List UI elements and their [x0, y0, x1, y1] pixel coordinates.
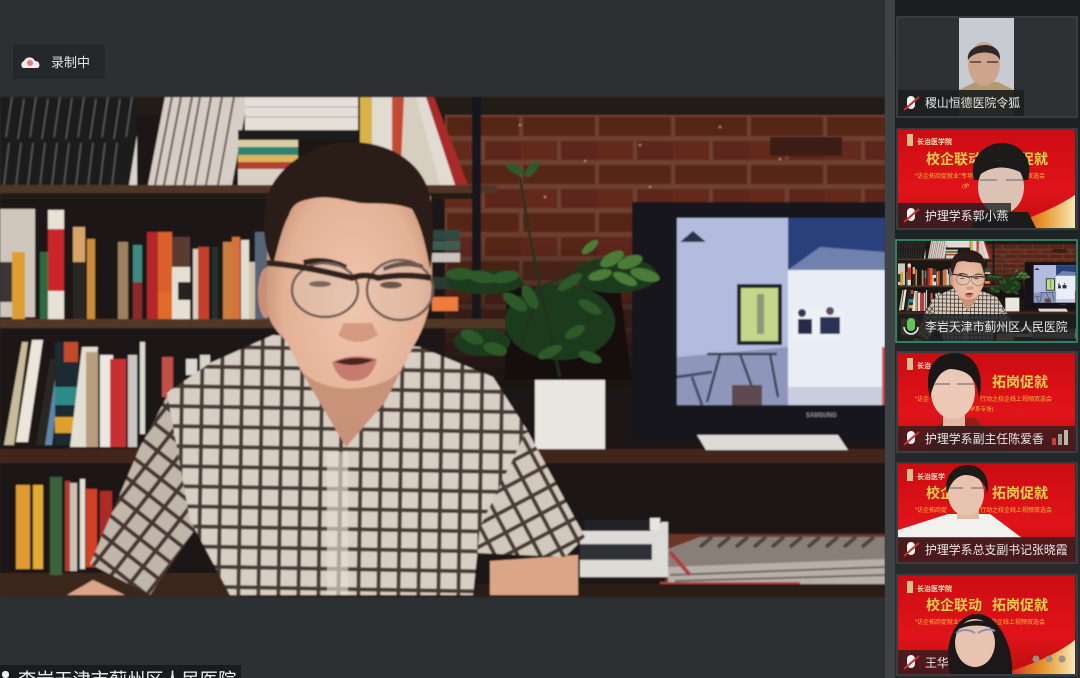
participant tile 4: 长治: [917, 361, 931, 370]
icon: cloud recording: [21, 57, 39, 68]
neck shade: [300, 369, 402, 447]
brick wall: [445, 115, 885, 387]
nose: [338, 323, 378, 342]
panel: participant sidebar: [885, 0, 1080, 678]
participant tile 5: 行动之校企线上视频双选会: [980, 506, 1052, 514]
vase: [535, 380, 605, 449]
participant tile 5: 拓岗促就: [992, 485, 1048, 501]
participant tile 2: [897, 129, 1077, 229]
muted mic icon: [904, 542, 919, 556]
participant tile 6: 校企联动: [926, 597, 982, 613]
face and neck: [267, 163, 432, 447]
participant tile 5: [897, 463, 1077, 563]
muted mic icon: [904, 96, 919, 110]
green mic icon: [904, 318, 918, 334]
third shelf books: [4, 340, 210, 447]
glasses: [267, 260, 433, 320]
participant tile 6: “访企拓岗促就业”专项行动之校企线上视频双选会: [915, 618, 1045, 626]
shelf boards: [0, 97, 885, 597]
participant tile 6: 拓岗促就: [992, 597, 1048, 613]
tv: SAMSUNG: [806, 413, 837, 419]
top shelf books: [0, 97, 468, 185]
participant tile 5: 校企: [926, 485, 954, 501]
participant tile 4: “访企: [915, 395, 929, 403]
participant tile 4: 行动之校企线上视频双选会: [980, 395, 1052, 403]
participant tile 4: 理学系专场): [964, 405, 994, 413]
participant tile 6: [897, 575, 1077, 675]
eyebrows: [303, 258, 423, 271]
participant tile 4: 拓岗促就: [992, 374, 1048, 390]
tablet: [697, 435, 848, 450]
typewriter: [580, 518, 668, 577]
participant tile 5: “访企拓岗促: [915, 506, 947, 514]
forearms: [67, 555, 578, 595]
muted mic icon: [904, 655, 919, 669]
plant: [446, 159, 661, 380]
tv: [632, 202, 885, 440]
participant tile 5: 长治医学: [917, 472, 945, 481]
recording label: 录制中: [51, 55, 90, 70]
eyes: [309, 281, 402, 288]
participant tile 1: [897, 17, 1077, 117]
short sleeves: [90, 373, 585, 595]
participant tile 2: (护: [962, 182, 970, 190]
name: 护理学系总支副书记张晓霞: [925, 543, 1068, 557]
name: 护理学系副主任陈爱香: [925, 432, 1044, 446]
speaker: [67, 142, 585, 595]
name: 护理学系郭小燕: [925, 209, 1008, 223]
name: 王华: [925, 656, 949, 670]
participant tile 2: 校企联动: [926, 151, 982, 167]
muted mic icon: [904, 208, 919, 222]
placket: [327, 452, 348, 595]
main speaker name tag: [0, 665, 241, 678]
magazines: [660, 534, 885, 584]
mouth: [332, 356, 377, 381]
participant tile 4: [897, 352, 1077, 452]
participant tile 2: “访企拓岗促就业”专项行动之校企线上视频双选会: [915, 172, 1045, 180]
bottom shelf books: [16, 477, 112, 575]
slide control dots: [1032, 656, 1066, 662]
participant tile 6: 长治医学院: [917, 584, 952, 593]
participant tile 2: 长治医学院: [917, 137, 952, 146]
signal bars: [1052, 430, 1068, 445]
ear: [258, 268, 274, 318]
hair: [264, 142, 433, 269]
muted mic icon: [904, 431, 919, 445]
participant tile 3: active speaker: [896, 240, 1077, 342]
name: 李岩天津市蓟州区人民医院: [925, 320, 1068, 334]
participant tile 2: 拓岗促就: [992, 151, 1048, 167]
recording badge: [13, 45, 105, 79]
name: 稷山恒德医院令狐: [925, 96, 1020, 110]
second shelf books: [0, 209, 460, 319]
video frame: [0, 97, 885, 597]
checked shirt: [167, 335, 527, 595]
